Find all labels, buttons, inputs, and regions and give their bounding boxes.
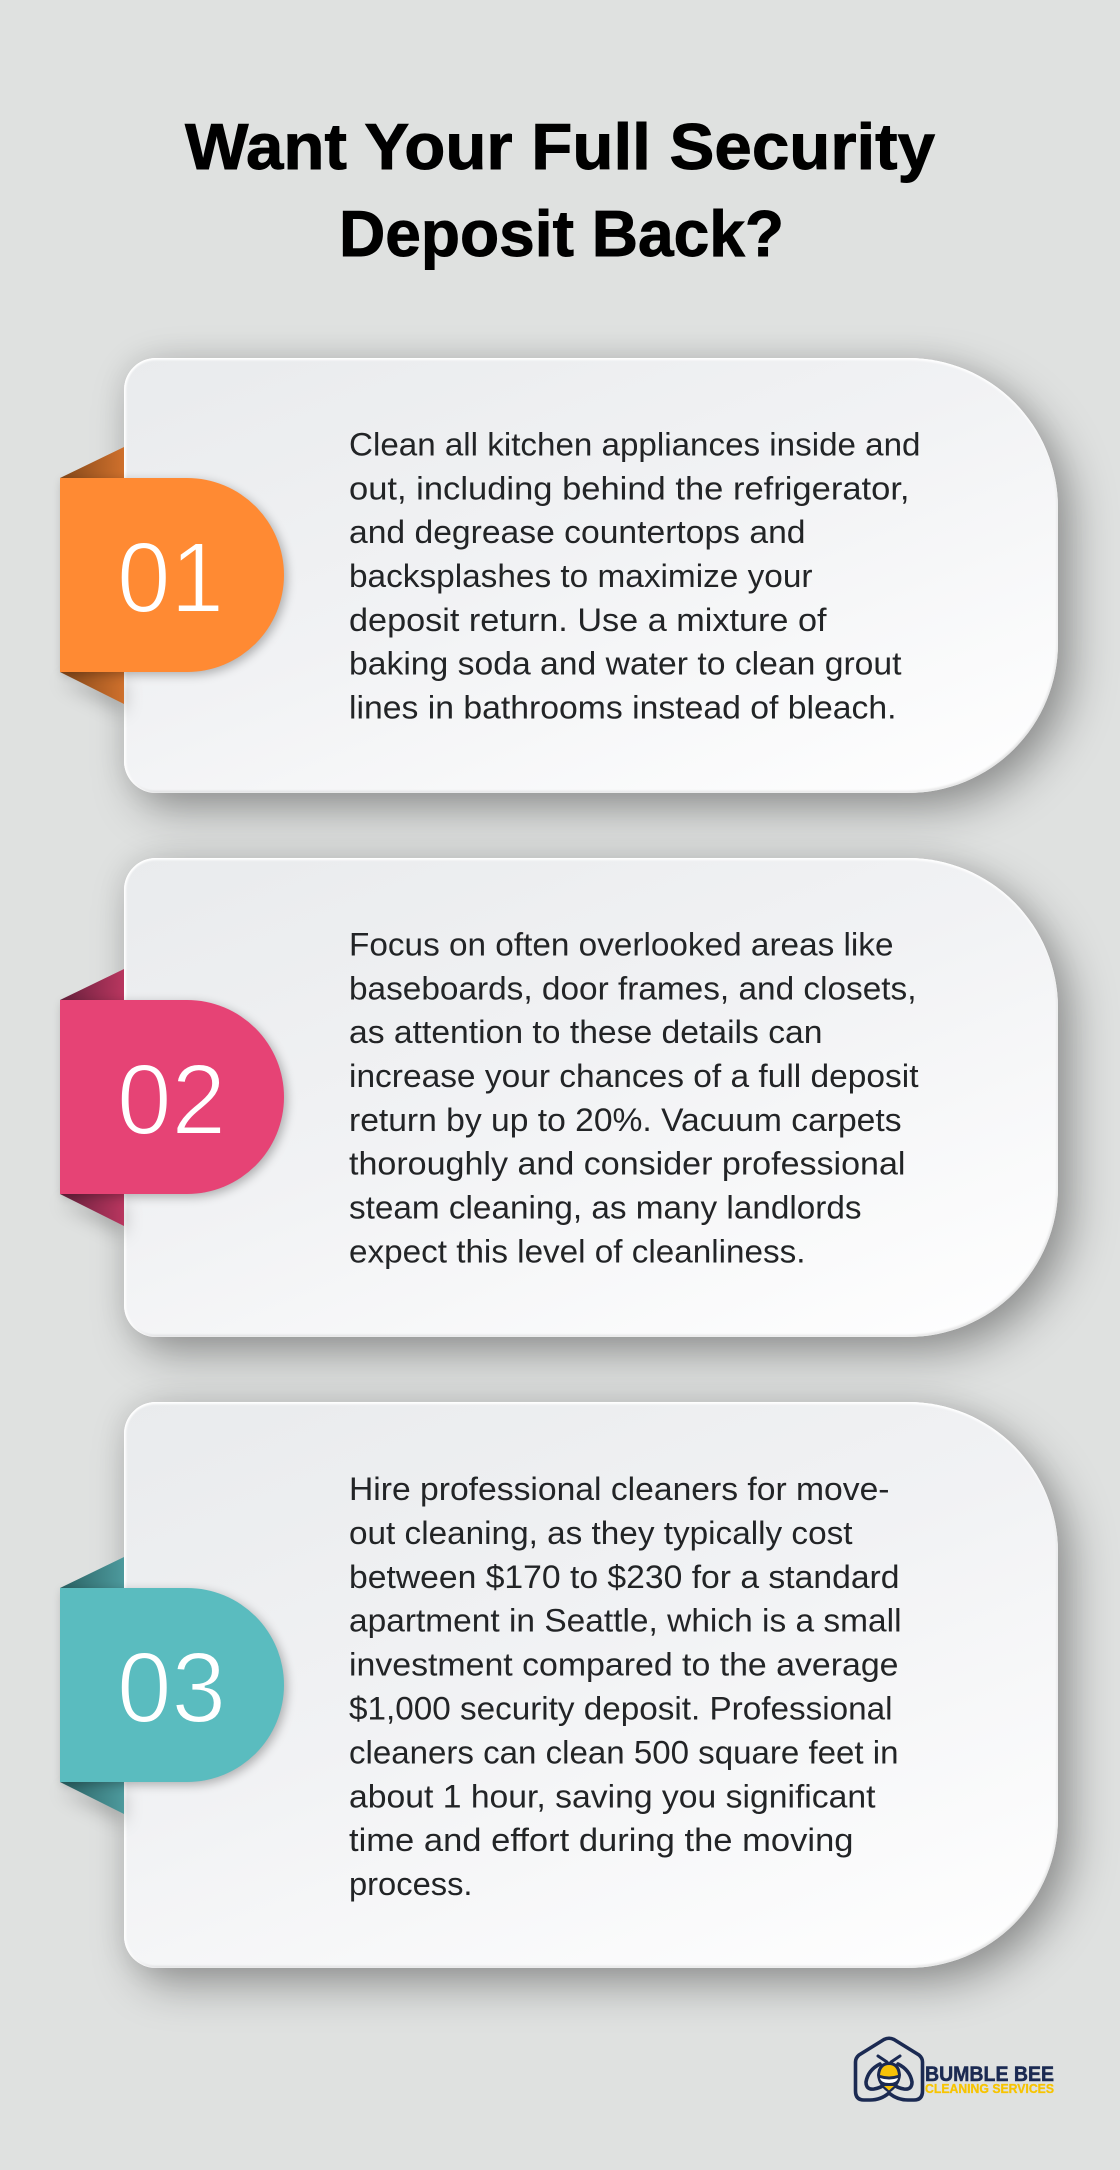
logo wordmark: BUMBLE BEE bbox=[925, 2063, 1054, 2086]
text block 1: baking soda and water to clean grout bbox=[348, 646, 901, 682]
panel: step 2 bbox=[58, 843, 1098, 1379]
number 02: 02 bbox=[117, 1044, 226, 1156]
text block 2: baseboards, door frames, and closets, bbox=[348, 970, 916, 1006]
text block 3: about 1 hour, saving you significant bbox=[348, 1778, 875, 1814]
text block 1: out, including behind the refrigerator, bbox=[348, 470, 909, 506]
ribbon fold bottom 3 bbox=[60, 1782, 132, 1826]
icon: house outline with bee bbox=[856, 2038, 922, 2100]
text block 1: and degrease countertops and bbox=[348, 514, 805, 550]
text block 1: Clean all kitchen appliances inside and bbox=[348, 426, 920, 462]
number 03: 03 bbox=[117, 1632, 226, 1744]
text block 2: expect this level of cleanliness. bbox=[348, 1233, 805, 1269]
title: Want Your Full Security bbox=[185, 110, 935, 183]
title bbox=[184, 110, 936, 270]
card background 3 bbox=[124, 1402, 1058, 1968]
text block 3: $1,000 security deposit. Professional bbox=[348, 1690, 892, 1726]
text block 3: process. bbox=[348, 1866, 472, 1902]
text block 2: steam cleaning, as many landlords bbox=[348, 1190, 861, 1226]
panel: step 1 bbox=[58, 343, 1098, 835]
ribbon fold top 1 bbox=[60, 447, 124, 478]
card background 1 bbox=[124, 358, 1058, 793]
number badge 3 bbox=[60, 1588, 284, 1782]
text block 1 bbox=[348, 426, 920, 726]
number badge 1 bbox=[60, 478, 284, 672]
text block 3: Hire professional cleaners for move- bbox=[348, 1471, 889, 1507]
logo tagline: CLEANING SERVICES bbox=[925, 2082, 1054, 2096]
logo: Bumble Bee Cleaning Services bbox=[854, 2036, 1054, 2102]
text block 3: cleaners can clean 500 square feet in bbox=[348, 1734, 898, 1770]
number badge 2 bbox=[60, 1000, 284, 1194]
panel: step 3 bbox=[58, 1387, 1098, 2010]
text block 2: as attention to these details can bbox=[348, 1014, 822, 1050]
text block 3: investment compared to the average bbox=[348, 1647, 898, 1683]
ribbon fold bottom 1 bbox=[60, 672, 132, 716]
text block 1: deposit return. Use a mixture of bbox=[348, 602, 826, 638]
text block 2: increase your chances of a full deposit bbox=[348, 1058, 918, 1094]
text block 3: between $170 to $230 for a standard bbox=[348, 1559, 899, 1595]
number 01: 01 bbox=[117, 522, 224, 634]
text block 2: Focus on often overlooked areas like bbox=[348, 926, 893, 962]
ribbon fold top 2 bbox=[60, 969, 124, 1000]
card background 2 bbox=[124, 858, 1058, 1337]
ribbon fold top 3 bbox=[60, 1557, 124, 1588]
text block 2: return by up to 20%. Vacuum carpets bbox=[348, 1102, 901, 1138]
title: Deposit Back? bbox=[339, 197, 784, 270]
text block 3: time and effort during the moving bbox=[348, 1822, 853, 1858]
text block 1: backsplashes to maximize your bbox=[348, 558, 812, 594]
text block 2 bbox=[348, 926, 918, 1269]
text block 3: apartment in Seattle, which is a small bbox=[348, 1603, 901, 1639]
text block 3 bbox=[348, 1471, 901, 1902]
ribbon fold bottom 2 bbox=[60, 1194, 132, 1238]
text block 2: thoroughly and consider professional bbox=[348, 1146, 905, 1182]
text block 1: lines in bathrooms instead of bleach. bbox=[348, 690, 896, 726]
text block 3: out cleaning, as they typically cost bbox=[348, 1515, 852, 1551]
